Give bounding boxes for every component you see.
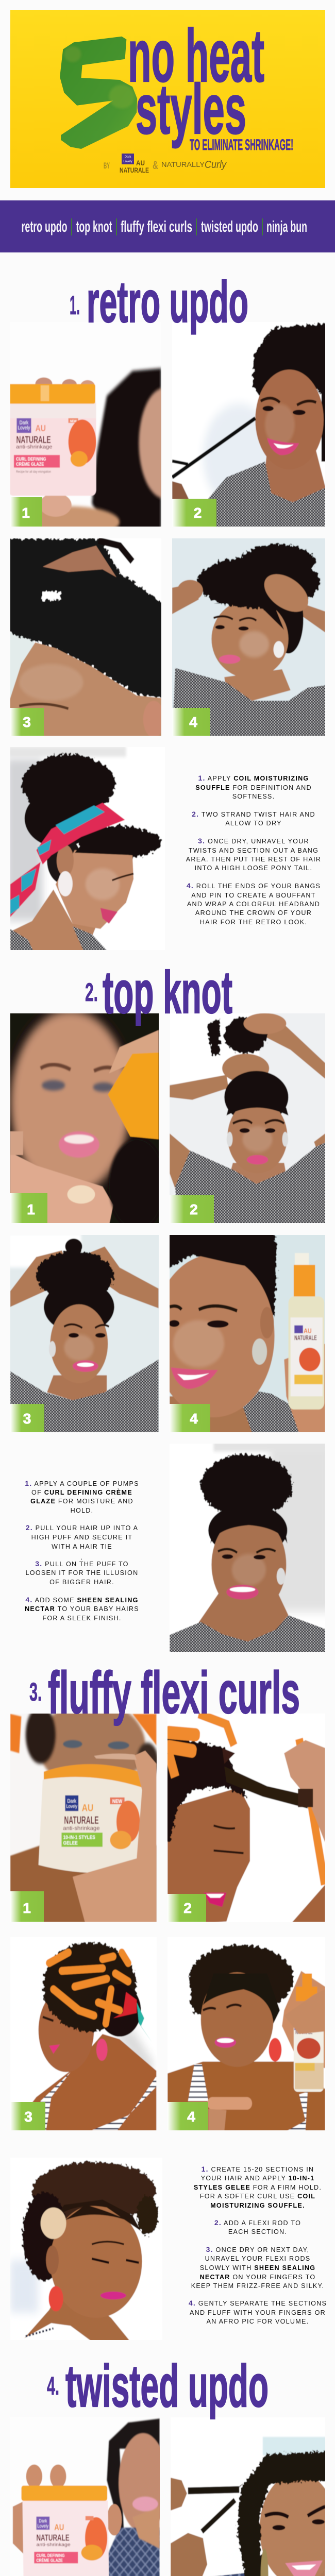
step badge 4 bbox=[167, 2102, 208, 2130]
instruction text: top knot: 2. PULL YOUR HAIR UP INTO A bbox=[26, 1523, 138, 1532]
photo: jar of curl defining creme glaze: anti-shrinkage bbox=[16, 444, 53, 450]
navigation band bbox=[0, 200, 335, 252]
photo: jar of 10-in-1 styles gelee: GELEE bbox=[63, 1840, 78, 1846]
photo: pulling hair into a high puff bbox=[170, 1013, 325, 1223]
photo: jar of 10-in-1 styles gelee: anti-shrinkage bbox=[63, 1825, 100, 1832]
byline and logos: NATURALLY bbox=[161, 160, 205, 168]
step badge 2 bbox=[172, 499, 216, 527]
step badge 1 bbox=[10, 1193, 47, 1223]
photo: two strand twisting bbox=[171, 2437, 325, 2576]
photo: sheen sealing nectar and face close up: NATURALE bbox=[294, 1334, 317, 1342]
photo: loosening the puff bbox=[10, 1235, 159, 1432]
section 3: fluffy flexi curls bbox=[0, 1660, 335, 2344]
step badge 1 bbox=[10, 497, 42, 527]
section 4: twisted updo bbox=[0, 2352, 335, 2576]
step badge 4: 4 bbox=[189, 714, 197, 730]
byline and logos: Curly bbox=[205, 159, 227, 171]
instruction text: top knot: HIGH PUFF AND SECURE IT bbox=[31, 1534, 132, 1541]
step badge 3: 3 bbox=[24, 2109, 32, 2125]
byline and logos: Lovely bbox=[123, 160, 132, 163]
photo: jar of 10-in-1 styles gelee bbox=[10, 1714, 157, 1922]
photo: holding curl defining creme glaze bbox=[12, 2417, 160, 2576]
heading: top knot: top knot bbox=[103, 959, 232, 1026]
photo: holding curl defining creme glaze: Lovely bbox=[38, 2523, 49, 2529]
instruction text: top knot: OF CURL DEFINING CRÈME bbox=[31, 1488, 132, 1496]
photo: holding curl defining creme glaze: AU bbox=[54, 2523, 64, 2533]
instruction text: retro updo: SOUFFLE FOR DEFINITION AND bbox=[195, 784, 312, 791]
photo: twisting hair strand bbox=[172, 322, 325, 527]
instruction text: top knot: FOR A SLEEK FINISH. bbox=[42, 1615, 122, 1622]
step badge 1: 1 bbox=[27, 1201, 35, 1217]
photo: jar of curl defining creme glaze: NATURALE bbox=[16, 434, 51, 446]
photo: jar of 10-in-1 styles gelee: Dark bbox=[68, 1798, 76, 1804]
photo: holding curl defining creme glaze: NATURALE bbox=[36, 2533, 70, 2543]
photo: finished fluffy flexi curls bbox=[10, 2160, 159, 2340]
panel: header bbox=[10, 10, 325, 188]
photo: jar of curl defining creme glaze: CRÈME GLAZE bbox=[16, 461, 44, 467]
section 1: retro updo: 1. bbox=[70, 291, 80, 320]
instruction text: retro updo: 2. TWO STRAND TWIST HAIR AND bbox=[192, 810, 315, 818]
instruction text: retro updo: 4. ROLL THE ENDS OF YOUR BANGS bbox=[187, 882, 321, 890]
instruction text: fluffy flexi curls bbox=[189, 2165, 327, 2325]
instruction text: fluffy flexi curls: MOISTURIZING SOUFFLE. bbox=[210, 2202, 305, 2209]
section 2: top knot bbox=[0, 959, 335, 1656]
title: styles: styles bbox=[136, 70, 246, 149]
instruction text: retro updo: 3. ONCE DRY, UNRAVEL YOUR bbox=[198, 837, 309, 845]
nav labels: twisted updo bbox=[201, 217, 258, 235]
instruction text: top knot: . bbox=[81, 1554, 83, 1561]
byline and logos: & bbox=[153, 159, 158, 172]
step badge 2: 2 bbox=[194, 505, 202, 521]
instruction text: retro updo: 1. APPLY COIL MOISTURIZING bbox=[198, 774, 309, 782]
nav labels: retro updo bbox=[22, 217, 67, 235]
instruction text: retro updo: TWISTS AND SECTION OUT A BANG bbox=[189, 847, 319, 854]
photo: flexi rods side profile bbox=[32, 1941, 157, 2130]
step badge 3: 3 bbox=[23, 1411, 31, 1427]
instruction text: top knot: WITH A HAIR TIE bbox=[52, 1543, 112, 1550]
photo: jar of curl defining creme glaze: Lovely bbox=[18, 425, 30, 431]
photo: jar of 10-in-1 styles gelee: NATURALE bbox=[64, 1814, 98, 1826]
step badge 4 bbox=[170, 1404, 210, 1432]
instruction text: fluffy flexi curls: SLOWLY WITH SHEEN SEALING bbox=[200, 2264, 315, 2272]
photo: holding curl defining creme glaze: Dark bbox=[39, 2518, 47, 2523]
nav labels: fluffy flexi curls bbox=[121, 217, 192, 235]
instruction text: fluffy flexi curls: STYLES GELEE FOR A FIRM HOLD. bbox=[194, 2184, 322, 2191]
photo: jar of curl defining creme glaze: AU bbox=[36, 424, 46, 434]
photo: sheen sealing nectar and face close up: AU bbox=[304, 1327, 312, 1335]
icon: green brush numeral five bbox=[60, 37, 137, 149]
section number 2: 2. bbox=[85, 978, 98, 1007]
instruction text: fluffy flexi curls: YOUR HAIR AND APPLY 10-IN-1 bbox=[201, 2175, 314, 2182]
step badge 3 bbox=[10, 708, 44, 736]
byline and logos: NATURALE bbox=[120, 166, 149, 174]
step badge 3 bbox=[10, 1404, 44, 1432]
instruction text: top knot: OF BIGGER HAIR. bbox=[49, 1579, 114, 1586]
nav labels bbox=[22, 217, 307, 235]
instruction text: retro updo: AROUND THE CROWN OF YOUR bbox=[195, 909, 312, 917]
photo: jar of curl defining creme glaze: NEW bbox=[70, 420, 77, 423]
section number 4: 4. bbox=[47, 2371, 59, 2400]
instruction text: retro updo: INTO A HIGH LOOSE PONY TAIL. bbox=[195, 865, 312, 872]
photo: jar of curl defining creme glaze bbox=[10, 366, 161, 527]
instruction text: top knot: 3. PULL ON THE PUFF TO bbox=[35, 1560, 129, 1568]
instruction text: fluffy flexi curls: FOR A SOFTER CURL USE COIL bbox=[200, 2193, 315, 2200]
instruction text: fluffy flexi curls: AND FLUFF WITH YOUR FINGERS OR bbox=[190, 2309, 326, 2316]
instruction text: top knot: NECTAR TO YOUR BABY HAIRS bbox=[25, 1605, 139, 1613]
byline and logos: AU bbox=[136, 159, 145, 167]
instruction text: top knot: LOOSEN IT FOR THE ILLUSION bbox=[26, 1569, 138, 1577]
photo: holding curl defining creme glaze: anti-shrinkage bbox=[36, 2541, 71, 2547]
instruction text: top knot: HOLD. bbox=[71, 1507, 93, 1514]
step badge 4 bbox=[172, 708, 210, 736]
photo: wrapping hair on flexi rod bbox=[167, 1714, 325, 1922]
step badge 1: 1 bbox=[22, 505, 30, 521]
yellow paper background bbox=[10, 10, 325, 188]
photo: sheen sealing nectar and face close up bbox=[170, 1235, 325, 1432]
step badge 3: 3 bbox=[23, 714, 31, 730]
section 1: retro updo bbox=[0, 269, 335, 955]
instruction text: fluffy flexi curls: AN AFRO PIC FOR VOLUME. bbox=[207, 2318, 309, 2325]
instruction text: retro updo bbox=[186, 774, 321, 926]
photo: spraying nectar and pointing: NATURALE bbox=[295, 2029, 312, 2035]
instruction text: fluffy flexi curls: UNRAVEL YOUR FLEXI RODS bbox=[205, 2255, 310, 2262]
instruction text: fluffy flexi curls: 4. GENTLY SEPARATE THE SECTIONS bbox=[189, 2299, 327, 2307]
step badge 2: 2 bbox=[190, 1201, 198, 1217]
instruction text: top knot bbox=[25, 1479, 139, 1622]
instruction text: retro updo: ALLOW TO DRY bbox=[225, 820, 282, 827]
step badge 4: 4 bbox=[190, 1411, 198, 1427]
instruction text: fluffy flexi curls: NECTAR ON YOUR FINGERS TO bbox=[200, 2274, 315, 2281]
photo: jar of curl defining creme glaze: Dark bbox=[20, 420, 28, 426]
instruction text: fluffy flexi curls: 3. ONCE DRY OR NEXT DAY, bbox=[206, 2245, 309, 2253]
instruction text: retro updo: AND PIN TO CREATE A BOUFFANT bbox=[191, 892, 316, 899]
photo: holding curl defining creme glaze: CRÈME GLAZE bbox=[36, 2558, 63, 2563]
photo: jar of 10-in-1 styles gelee: AU bbox=[82, 1802, 93, 1814]
photo: holding curl defining creme glaze: CURL DEFINING bbox=[36, 2553, 64, 2558]
photo: pinning the bouffant bbox=[172, 538, 325, 736]
instruction text: fluffy flexi curls: 1. CREATE 15-20 SECTIONS IN bbox=[202, 2165, 314, 2173]
instruction text: retro updo: AREA. THEN PUT THE REST OF HAIR bbox=[186, 856, 321, 863]
step badge 2 bbox=[167, 1894, 206, 1922]
instruction text: top knot: 1. APPLY A COUPLE OF PUMPS bbox=[25, 1479, 139, 1487]
photo: finished retro updo with headband bbox=[10, 747, 162, 950]
instruction text: fluffy flexi curls: KEEP THEM FRIZZ-FREE AND SILKY. bbox=[191, 2282, 324, 2290]
instruction text: retro updo: AND WRAP A COLORFUL HEADBAND bbox=[187, 901, 320, 908]
nav labels: top knot bbox=[76, 217, 112, 235]
photo: jar of 10-in-1 styles gelee: NEW bbox=[112, 1799, 122, 1804]
photo: finished top knot bbox=[170, 1444, 325, 1652]
byline and logos: Dark bbox=[125, 156, 131, 159]
instruction text: fluffy flexi curls: EACH SECTION. bbox=[228, 2228, 287, 2235]
step badge 2 bbox=[170, 1195, 214, 1223]
step badge 3 bbox=[10, 2102, 45, 2130]
byline and logos: BY bbox=[104, 161, 110, 171]
photo: jar of 10-in-1 styles gelee: Lovely bbox=[66, 1803, 78, 1809]
photo: close up of hair and forehead bbox=[10, 538, 161, 736]
step badge 1: 1 bbox=[23, 1900, 31, 1916]
byline and logos bbox=[104, 154, 227, 174]
section number 3: 3. bbox=[29, 1677, 42, 1706]
photo: blurred face with creme glaze in palm bbox=[10, 1013, 159, 1223]
photo: jar of 10-in-1 styles gelee: 10-IN-1 STYLES bbox=[63, 1835, 95, 1840]
step badge 4: 4 bbox=[187, 2109, 195, 2125]
instruction text: top knot: 4. ADD SOME SHEEN SEALING bbox=[25, 1596, 139, 1604]
photo: spraying nectar and pointing bbox=[167, 1943, 325, 2130]
instruction text: top knot: GLAZE FOR MOISTURE AND bbox=[30, 1498, 133, 1505]
instruction text: retro updo: SOFTNESS. bbox=[232, 793, 275, 800]
photo: jar of curl defining creme glaze: Recipe for all day elongation bbox=[16, 470, 51, 474]
step badge 1 bbox=[10, 1891, 44, 1922]
step badge 2: 2 bbox=[183, 1900, 192, 1916]
instruction text: retro updo: HAIR FOR THE RETRO LOOK. bbox=[200, 919, 307, 926]
instruction text: fluffy flexi curls: 2. ADD A FLEXI ROD TO bbox=[214, 2218, 301, 2227]
photo: jar of curl defining creme glaze: CURL DEFINING bbox=[16, 456, 46, 462]
